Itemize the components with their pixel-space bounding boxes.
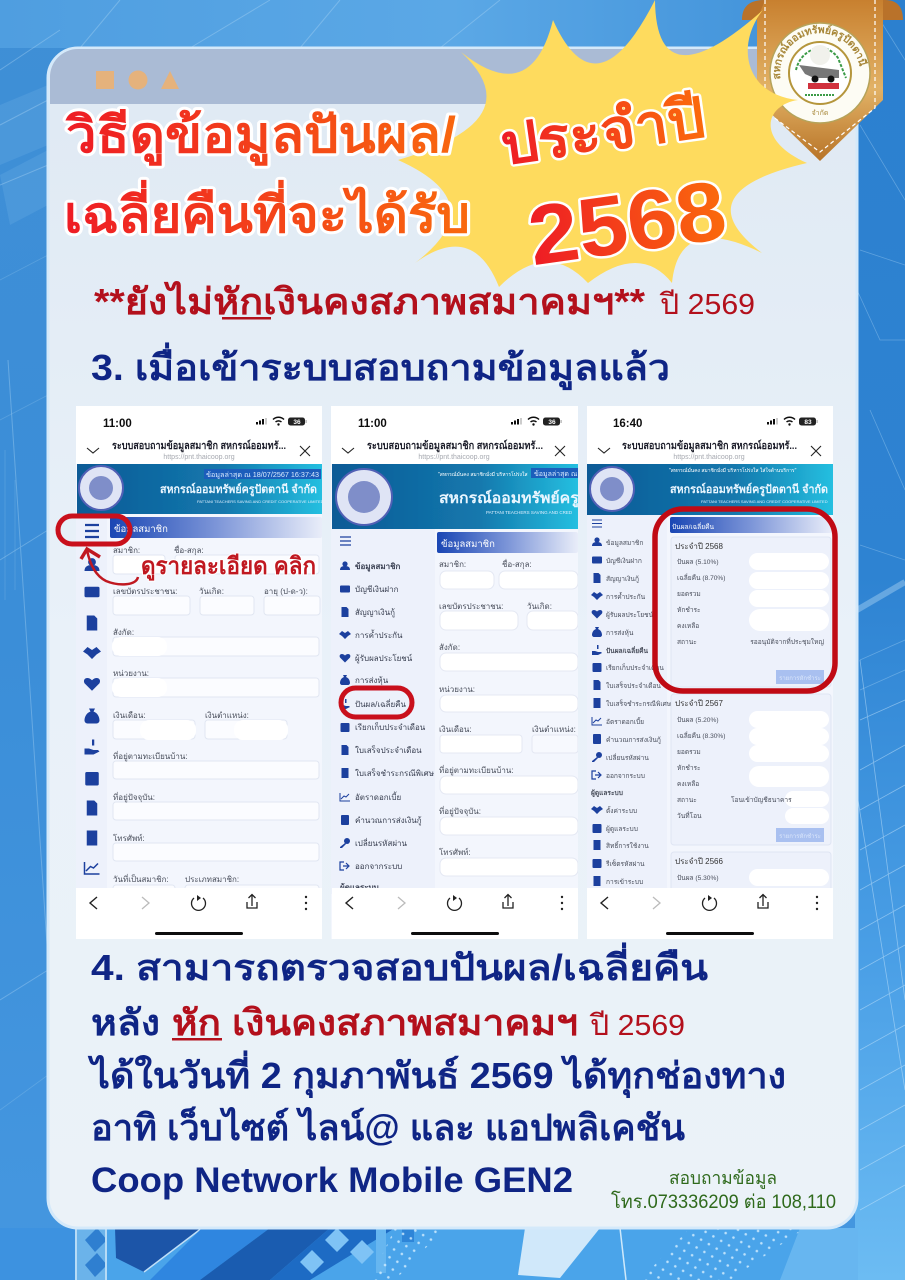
phone screenshot 3: ระบบสอบถามข้อมูลสมาชิก สหกรณ์ออมทรั...	[622, 439, 797, 453]
card: year 2567: ยอดรวม	[677, 749, 701, 756]
card: year 2568: หักชำระ	[677, 606, 701, 614]
title: วิธีดูข้อมูลปันผล/	[65, 107, 456, 166]
burst text: year: ประจำปี	[497, 86, 709, 177]
side menu: บัญชีเงินฝาก	[355, 585, 399, 594]
form labels: สังกัด:	[113, 628, 134, 637]
side menu: เรียกเก็บประจำเดือน	[355, 722, 426, 732]
form labels: อายุ (ป-ด-ว):	[264, 587, 308, 596]
card: year 2568: รายการหักชำระ	[779, 675, 821, 682]
bottom tech scene	[0, 1228, 858, 1280]
phone screenshot 1: ระบบสอบถามข้อมูลสมาชิก สหกรณ์ออมทรั...	[112, 439, 286, 453]
side menu: อัตราดอกเบี้ย	[606, 717, 644, 726]
contact info: สอบถามข้อมูล	[669, 1168, 777, 1189]
phone screenshot 2: https://pnt.thaicoop.org	[418, 454, 490, 461]
side menu: สิทธิ์การใช้งาน	[606, 841, 649, 850]
form labels: ประเภทสมาชิก:	[185, 875, 239, 884]
side menu: ผู้ดูแลระบบ	[606, 825, 638, 833]
section header: ข้อมูลสมาชิก	[441, 539, 495, 550]
side menu: ใบเสร็จชำระกรณีพิเศษ	[606, 699, 672, 708]
form labels: เลขบัตรประชาชน:	[439, 602, 503, 611]
form labels: ที่อยู่ตามทะเบียนบ้าน:	[439, 764, 514, 776]
card: year 2567: วันที่โอน	[677, 811, 702, 820]
banner: PATTANI TEACHERS SAVING AND CREDIT COOPERATIVE LIMITED	[197, 499, 324, 504]
side menu: ใบเสร็จชำระกรณีพิเศษ	[355, 768, 434, 778]
form labels: เลขบัตรประชาชน:	[113, 587, 177, 596]
card: year 2567: รายการหักชำระ	[779, 833, 821, 840]
form labels: โทรศัพท์:	[113, 833, 145, 843]
section header	[110, 517, 322, 538]
form labels: โทรศัพท์:	[439, 847, 471, 857]
form labels: ที่อยู่ตามทะเบียนบ้าน:	[113, 750, 188, 762]
starburst	[398, 0, 807, 287]
card: year 2567: เฉลี่ยคืน (8.30%)	[677, 731, 726, 740]
step 3 heading: 3. เมื่อเข้าระบบสอบถามข้อมูลแล้ว	[91, 342, 670, 391]
form labels: วันเกิด:	[527, 602, 552, 611]
phone screenshot 1	[76, 406, 324, 939]
phone screenshot 3	[587, 406, 833, 939]
form labels: เงินตำแหน่ง:	[205, 711, 249, 720]
form labels	[439, 558, 576, 857]
form labels: วันเกิด:	[199, 587, 224, 596]
side menu: ปันผล/เฉลี่ยคืน	[606, 645, 648, 655]
card: year 2567: คงเหลือ	[677, 780, 699, 788]
menu icons	[83, 525, 101, 874]
phone screenshot 3: 83	[804, 419, 812, 426]
cooperative seal: จำกัด	[812, 109, 828, 117]
side menu: การส่งหุ้น	[355, 676, 389, 685]
step 4 text block: ปี 2569	[590, 1010, 685, 1042]
side menu	[339, 537, 434, 893]
side menu: การค้ำประกัน	[606, 592, 646, 601]
form labels: สมาชิก:	[439, 560, 466, 569]
side menu: ออกจากระบบ	[606, 773, 645, 780]
form labels: สังกัด:	[439, 643, 460, 652]
contact info: โทร.073336209 ต่อ 108,110	[611, 1190, 836, 1213]
step 4 text block: ได้ในวันที่ 2 กุมภาพันธ์ 2569 ได้ทุกช่องทาง	[87, 1050, 786, 1099]
section header	[670, 517, 832, 533]
title	[64, 107, 470, 243]
step 4 text block	[87, 942, 786, 1200]
side menu: ผู้รับผลประโยชน์	[606, 611, 654, 619]
banner	[587, 464, 833, 515]
side menu: สัญญาเงินกู้	[355, 608, 395, 618]
form labels: เงินตำแหน่ง:	[532, 725, 576, 734]
banner: สหกรณ์ออมทรัพย์ครูปัตตานี จำกัด	[670, 482, 828, 497]
section header	[437, 532, 578, 553]
phone screenshot 1: 36	[293, 419, 301, 426]
side menu: คำนวณการส่งเงินกู้	[355, 816, 422, 826]
burst text: year: 2568	[523, 162, 732, 283]
card: year 2566	[670, 852, 832, 888]
form labels	[113, 544, 308, 884]
card: year 2568: สถานะ	[677, 639, 697, 646]
banner: PATTANI TEACHERS SAVING AND CRED	[486, 510, 573, 515]
side menu: การส่งหุ้น	[606, 629, 634, 637]
step 4 text block: 4. สามารถตรวจสอบปันผล/เฉลี่ยคืน	[91, 942, 708, 988]
side menu: ปันผล/เฉลี่ยคืน	[355, 698, 406, 709]
side menu: ใบเสร็จประจำเดือน	[606, 681, 661, 690]
side menu: การค้ำประกัน	[355, 629, 403, 640]
banner: ข้อมูลล่าสุด ณ 18/07/2567 16:37:43	[206, 471, 319, 479]
side menu: ผู้รับผลประโยชน์	[355, 653, 413, 664]
title: เฉลี่ยคืนที่จะได้รับ	[64, 180, 470, 243]
card: year 2568: ประจำปี 2568	[675, 542, 724, 551]
click callout: ดูรายละเอียด คลิก	[141, 553, 316, 581]
burst text: year	[497, 86, 732, 283]
card: year 2566: ปันผล (5.30%)	[677, 874, 719, 882]
phone screenshot 3: https://pnt.thaicoop.org	[673, 454, 745, 461]
form labels: วันที่เป็นสมาชิก:	[113, 873, 169, 884]
card: year 2568: คงเหลือ	[677, 622, 699, 630]
card: year 2568: ปันผล (5.10%)	[677, 558, 719, 566]
side menu: เปลี่ยนรหัสผ่าน	[355, 837, 408, 848]
banner: "สหกรณ์มั่นคง สมาชิกมั่งมี บริหารโปร่งใส ใส่ใจด้านบริการ"	[669, 467, 797, 474]
step 4 text block: เงินคงสภาพสมาคมฯ	[232, 1002, 578, 1043]
form labels: ที่อยู่ปัจจุบัน:	[439, 805, 481, 817]
phone screenshot 2: 11:00	[358, 418, 387, 430]
step 4 text block: อาทิ เว็บไซต์ ไลน์@ และ แอปพลิเคชัน	[91, 1105, 685, 1148]
side menu: เรียกเก็บประจำเดือน	[606, 663, 664, 672]
side menu: ตั้งค่าระบบ	[606, 806, 637, 815]
form labels: เงินเดือน:	[439, 725, 472, 734]
form labels: หน่วยงาน:	[439, 685, 475, 694]
side menu: เปลี่ยนรหัสผ่าน	[606, 753, 649, 762]
card: year 2567: โอนเข้าบัญชีธนาคาร	[731, 796, 792, 804]
form fields	[112, 555, 320, 895]
card: year 2567	[671, 694, 831, 845]
subheading: not yet deducted: ปี 2569	[660, 289, 755, 321]
banner: สหกรณ์ออมทรัพย์ครูปัต	[439, 489, 599, 508]
side menu: อัตราดอกเบี้ย	[355, 791, 401, 802]
banner	[77, 464, 324, 514]
phone screenshot 1: 11:00	[103, 418, 132, 430]
step 4 text block: หลัง	[91, 1002, 160, 1043]
banner: ข้อมูลล่าสุด ณ	[534, 470, 578, 478]
card: year 2567: ประจำปี 2567	[675, 699, 724, 708]
card: year 2568: ยอดรวม	[677, 591, 701, 598]
card: year 2568: เฉลี่ยคืน (8.70%)	[677, 573, 726, 582]
side menu: ใบเสร็จประจำเดือน	[355, 745, 422, 755]
side menu: สัญญาเงินกู้	[606, 575, 639, 583]
side menu: ข้อมูลสมาชิก	[355, 561, 401, 572]
window control icons	[96, 70, 179, 90]
card: year 2567: หักชำระ	[677, 764, 701, 772]
red highlight around dividend card	[655, 509, 835, 691]
form fields	[440, 571, 578, 876]
banner: PATTANI TEACHERS SAVING AND CREDIT COOPERATIVE LIMITED	[701, 499, 828, 504]
side menu: บัญชีเงินฝาก	[606, 557, 642, 565]
section header: ข้อมูลสมาชิก	[114, 524, 168, 535]
phone screenshot 2: 36	[548, 419, 556, 426]
subheading: not yet deducted: **ยังไม่หักเงินคงสภาพสมาคมฯ**	[94, 280, 645, 322]
side menu	[591, 520, 672, 886]
form labels: ชื่อ-สกุล:	[174, 544, 204, 555]
red curved arrow	[81, 549, 138, 584]
banner	[332, 464, 599, 529]
side menu: ออกจากระบบ	[355, 862, 402, 871]
form labels: สมาชิก:	[113, 546, 140, 555]
contact info	[611, 1168, 836, 1213]
ribbon badge	[742, 0, 903, 161]
step 4 text block: Coop Network Mobile GEN2	[91, 1161, 573, 1200]
card: year 2568: รออนุมัติจากที่ประชุมใหญ่	[750, 637, 824, 646]
card: year 2568	[671, 537, 831, 687]
side menu: ผู้ดูแลระบบ	[591, 788, 623, 798]
form labels: เงินเดือน:	[113, 711, 146, 720]
card: year 2567: สถานะ	[677, 797, 697, 804]
side menu: การเข้าระบบ	[606, 878, 643, 886]
form labels: หน่วยงาน:	[113, 669, 149, 678]
cooperative seal	[769, 22, 871, 124]
side menu: ผู้ดูแลระบบ	[340, 882, 379, 893]
banner: สหกรณ์ออมทรัพย์ครูปัตตานี จำกัด	[160, 482, 317, 497]
form labels: ที่อยู่ปัจจุบัน:	[113, 791, 155, 803]
form labels: ชื่อ-สกุล:	[502, 558, 532, 569]
phone screenshot 1: https://pnt.thaicoop.org	[163, 454, 235, 461]
section header: ปันผล/เฉลี่ยคืน	[672, 522, 714, 531]
phone screenshot 3: 16:40	[613, 418, 642, 430]
side menu: ข้อมูลสมาชิก	[606, 539, 643, 547]
side menu: คำนวณการส่งเงินกู้	[606, 736, 661, 744]
card: year 2567: ปันผล (5.20%)	[677, 716, 719, 724]
card: year 2566: ประจำปี 2566	[675, 857, 724, 866]
phone screenshot 2	[331, 406, 599, 939]
red highlight around dividend menu	[341, 688, 412, 717]
red highlight around hamburger	[58, 516, 130, 544]
cooperative seal: สหกรณ์ออมทรัพย์ครูปัตตานี	[774, 24, 868, 80]
banner: "สหกรณ์มั่นคง สมาชิกมั่งมี บริหารโปร่งใส	[438, 471, 528, 478]
side menu: รีเซ็ตรหัสผ่าน	[606, 859, 645, 868]
phone screenshot 2: ระบบสอบถามข้อมูลสมาชิก สหกรณ์ออมทรั...	[367, 439, 543, 453]
step 4 text block: หัก	[172, 1002, 221, 1043]
